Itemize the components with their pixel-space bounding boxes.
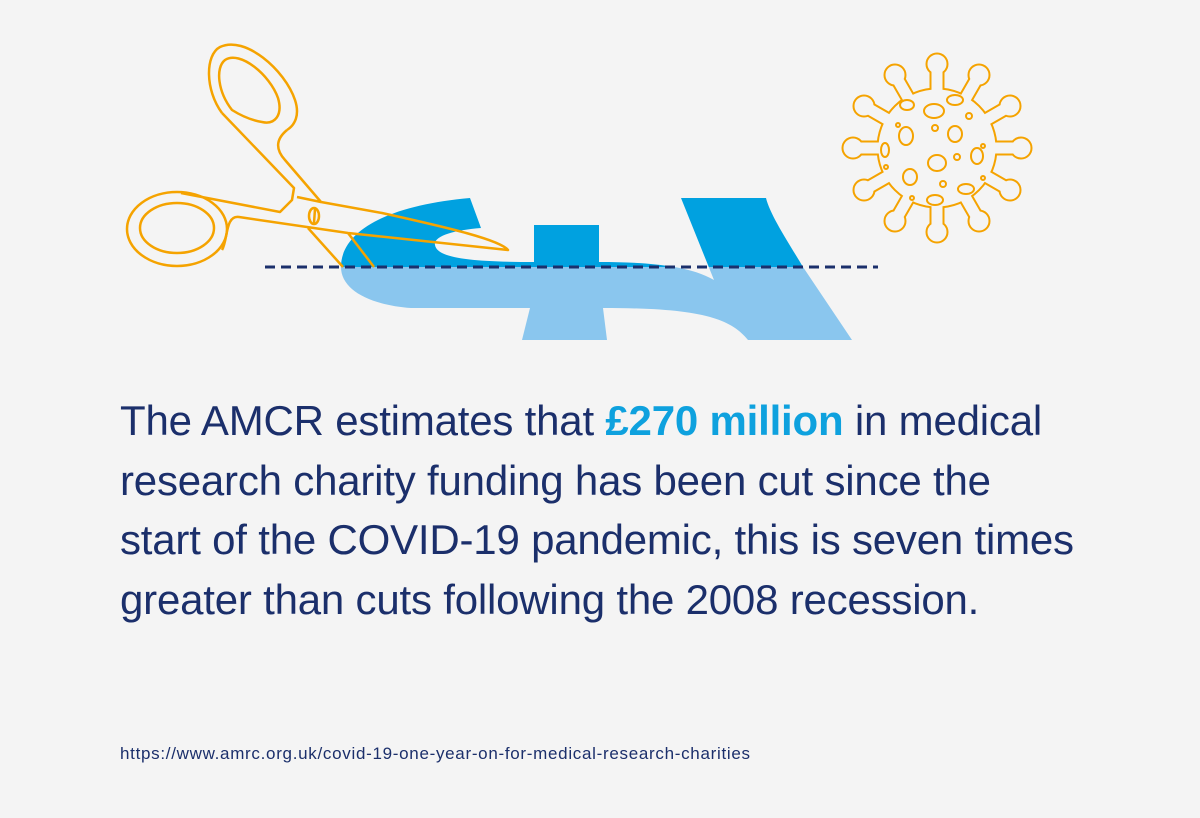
source url: https://www.amrc.org.uk/covid-19-one-year-on-for-medical-research-charities <box>120 744 751 763</box>
main statement text: The AMCR estimates that £270 million in medical <box>120 397 1042 444</box>
illustration: scissors cutting pound sign <box>126 43 1032 340</box>
main statement text <box>120 397 1074 622</box>
pound sign (cut) <box>341 198 852 340</box>
dashed cut line <box>265 266 878 268</box>
icon: virus <box>844 55 1030 241</box>
icon: scissors <box>127 45 508 267</box>
main statement text: greater than cuts following the 2008 recession. <box>120 576 979 622</box>
main statement text: research charity funding has been cut since the <box>120 456 991 504</box>
main statement text: start of the COVID-19 pandemic, this is seven times <box>120 516 1074 563</box>
